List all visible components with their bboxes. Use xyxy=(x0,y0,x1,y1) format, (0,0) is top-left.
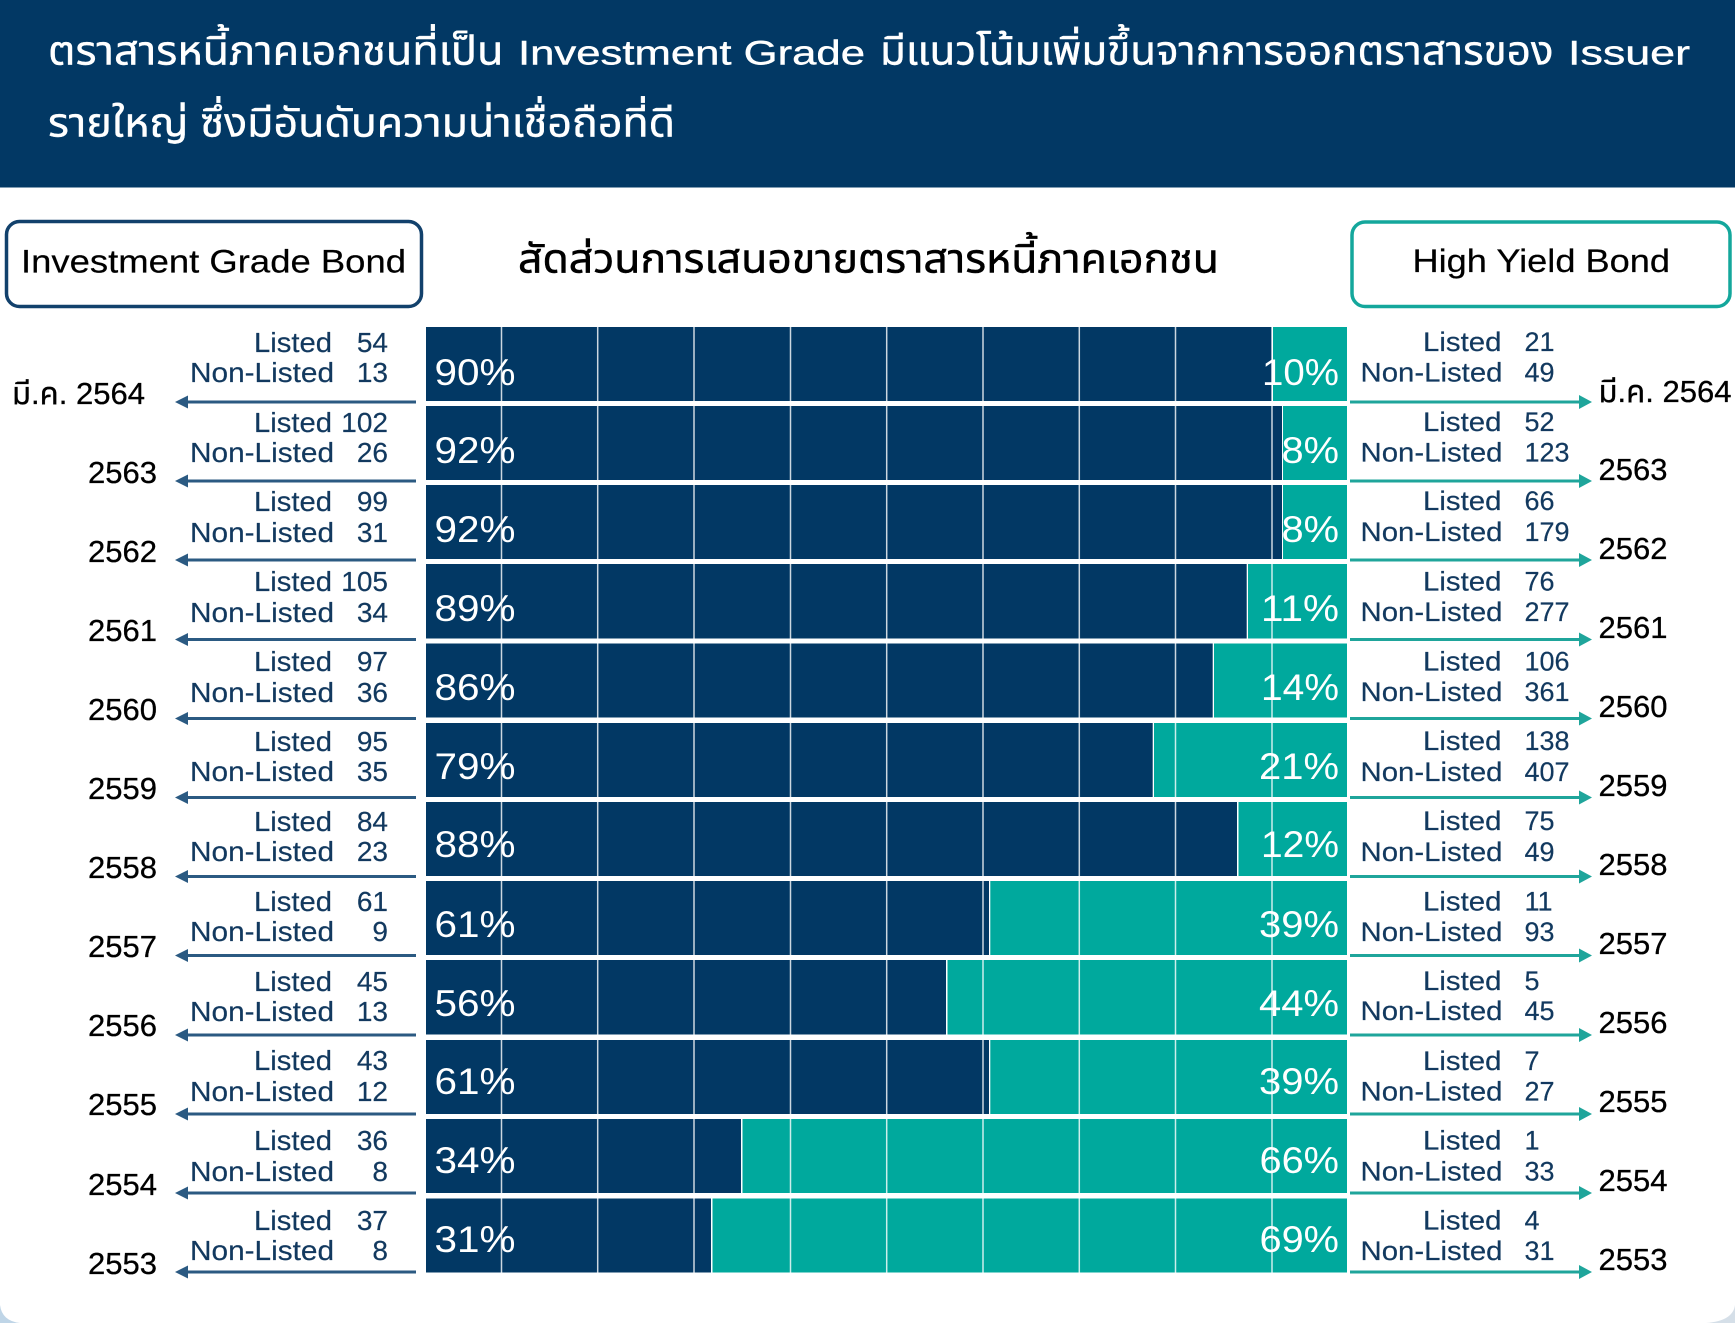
row: 2553 high yield: 31 xyxy=(1524,1236,1555,1266)
row: 2560 high yield: Non-Listed xyxy=(1360,677,1502,707)
row: 2560 investment grade: Non-Listed xyxy=(190,677,334,708)
row: 2555 high yield: 27 xyxy=(1524,1076,1555,1106)
bar: 2561: 89% xyxy=(434,588,516,629)
row: 2558 high yield xyxy=(1350,806,1667,884)
row: 2559 high yield: 2559 xyxy=(1598,768,1667,803)
bar: 2559: 79% xyxy=(434,746,516,787)
header banner with title: Investment Grade xyxy=(518,34,865,72)
row: 2553 investment grade: 2553 xyxy=(88,1246,157,1281)
row: 2557 investment grade xyxy=(88,886,416,964)
row: 2554 high yield: 2554 xyxy=(1598,1163,1667,1198)
row: 2554 investment grade: 36 xyxy=(357,1125,388,1156)
bar: 2563: 92% xyxy=(434,430,516,471)
row: 2562 high yield: Listed xyxy=(1423,486,1502,516)
row: 2555 investment grade: 2555 xyxy=(88,1087,157,1122)
row: 2554 investment grade: Non-Listed xyxy=(190,1156,334,1187)
row: 2561 investment grade: Non-Listed xyxy=(190,597,334,628)
bar: 2556: 44% xyxy=(1259,983,1339,1024)
row: มี.ค. 2564 high yield: Non-Listed xyxy=(1360,358,1502,388)
header banner with title: Issuer xyxy=(1568,34,1690,72)
row: มี.ค. 2564 investment grade xyxy=(12,327,416,411)
row: 2563 high yield: 2563 xyxy=(1598,452,1667,487)
row: 2558 high yield: 75 xyxy=(1524,806,1555,836)
row: 2562 investment grade: 2562 xyxy=(88,534,157,569)
row: 2558 high yield: Non-Listed xyxy=(1360,837,1502,867)
row: 2553 high yield: 4 xyxy=(1524,1206,1540,1236)
row: 2553 high yield: 2553 xyxy=(1598,1242,1667,1277)
row: 2554 high yield: Listed xyxy=(1423,1126,1502,1156)
row: 2554 high yield xyxy=(1350,1126,1667,1200)
row: มี.ค. 2564 high yield xyxy=(1350,327,1732,409)
row: 2554 high yield: 1 xyxy=(1524,1126,1540,1156)
row: 2563 investment grade: 26 xyxy=(357,437,388,468)
row: 2557 investment grade: 9 xyxy=(372,916,388,947)
row: 2560 high yield: Listed xyxy=(1423,646,1502,676)
row: 2556 high yield: Non-Listed xyxy=(1360,996,1502,1026)
bar: 2553: 31% xyxy=(434,1219,516,1260)
bar: 2554: 34% xyxy=(434,1140,516,1181)
legend box: High Yield Bond: High Yield Bond xyxy=(1412,243,1670,279)
bar: 2557 xyxy=(426,881,1347,955)
bar: 2556: 56% xyxy=(434,983,516,1024)
row: 2556 investment grade xyxy=(88,966,416,1043)
row: 2559 high yield: 407 xyxy=(1524,757,1570,787)
bar: 2556 xyxy=(426,960,1347,1034)
row: 2560 investment grade: 2560 xyxy=(88,692,157,727)
header banner with title xyxy=(0,0,1735,188)
row: 2560 investment grade: 36 xyxy=(357,677,388,708)
row: 2563 high yield: 123 xyxy=(1524,438,1570,468)
row: 2562 investment grade: 31 xyxy=(357,517,388,548)
row: 2559 investment grade: Listed xyxy=(254,726,332,757)
row: 2554 investment grade xyxy=(88,1125,416,1202)
row: 2557 high yield: 93 xyxy=(1524,917,1555,947)
row: มี.ค. 2564 high yield: มี.ค. 2564 xyxy=(1598,374,1732,409)
row: 2562 high yield: 66 xyxy=(1524,486,1555,516)
row: 2556 high yield: Listed xyxy=(1423,966,1502,996)
bar: 2554: 66% xyxy=(1260,1140,1339,1181)
bar: 2559: 21% xyxy=(1259,746,1339,787)
row: 2563 high yield: Listed xyxy=(1423,407,1502,437)
row: 2560 investment grade xyxy=(88,646,416,727)
row: มี.ค. 2564 investment grade: Listed xyxy=(254,327,332,358)
row: 2561 high yield xyxy=(1350,566,1667,646)
bar: 2555: 39% xyxy=(1259,1061,1339,1102)
row: 2563 investment grade: 102 xyxy=(341,407,388,438)
row: 2556 high yield xyxy=(1350,966,1667,1042)
row: 2555 investment grade: 43 xyxy=(357,1045,388,1076)
row: 2557 high yield: Non-Listed xyxy=(1360,917,1502,947)
row: 2558 investment grade: Non-Listed xyxy=(190,836,334,867)
row: 2561 investment grade xyxy=(88,566,416,648)
row: 2555 investment grade: Listed xyxy=(254,1045,332,1076)
bar: 2561: 11% xyxy=(1261,588,1339,629)
bar: 2555: 61% xyxy=(434,1061,516,1102)
row: 2558 high yield: 2558 xyxy=(1598,847,1667,882)
row: มี.ค. 2564 investment grade: 54 xyxy=(357,327,388,358)
bar: 2562 xyxy=(426,485,1347,559)
row: 2559 high yield: Non-Listed xyxy=(1360,757,1502,787)
row: 2558 investment grade xyxy=(88,806,416,885)
row: 2556 investment grade: 13 xyxy=(357,996,388,1027)
row: 2562 high yield xyxy=(1350,486,1667,567)
bar: 2558 xyxy=(426,802,1347,876)
row: 2561 high yield: 76 xyxy=(1524,566,1555,596)
legend box: High Yield Bond xyxy=(1352,222,1730,306)
bar: 2562: 92% xyxy=(434,509,516,550)
row: 2559 high yield xyxy=(1350,726,1667,804)
row: 2563 investment grade: Listed xyxy=(254,407,332,438)
header banner with title: มีแนวโน้มเพิ่มขึ้นจากการออกตราสารของ xyxy=(880,24,1554,74)
bar: มี.ค. 2564: 10% xyxy=(1262,352,1339,393)
row: 2556 high yield: 2556 xyxy=(1598,1005,1667,1040)
bar: 2562: 8% xyxy=(1282,509,1339,550)
bar: 2554 xyxy=(426,1119,1347,1193)
row: 2561 high yield: 277 xyxy=(1524,597,1570,627)
row: 2560 investment grade: 97 xyxy=(357,646,388,677)
row: 2558 investment grade: 84 xyxy=(357,806,388,837)
row: 2558 high yield: 49 xyxy=(1524,837,1555,867)
row: 2559 investment grade xyxy=(88,726,416,806)
row: 2559 investment grade: Non-Listed xyxy=(190,756,334,787)
row: 2563 investment grade: Non-Listed xyxy=(190,437,334,468)
bar: 2559 xyxy=(426,723,1347,797)
row: 2559 investment grade: 95 xyxy=(357,726,388,757)
row: 2554 investment grade: 2554 xyxy=(88,1167,157,1202)
row: 2562 high yield: 2562 xyxy=(1598,531,1667,566)
row: 2557 high yield: 11 xyxy=(1524,886,1553,916)
row: 2555 investment grade: 12 xyxy=(357,1076,388,1107)
row: 2561 high yield: 2561 xyxy=(1598,610,1667,645)
bar: 2557: 39% xyxy=(1259,904,1339,945)
row: 2557 investment grade: 2557 xyxy=(88,929,157,964)
row: 2555 investment grade: Non-Listed xyxy=(190,1076,334,1107)
bar: 2555 xyxy=(426,1040,1347,1114)
row: 2555 high yield: Non-Listed xyxy=(1360,1076,1502,1106)
High Yield counts, arrows and years xyxy=(1350,327,1732,1279)
bar: มี.ค. 2564: 90% xyxy=(434,352,516,393)
bar: 2553: 69% xyxy=(1260,1219,1339,1260)
row: 2560 investment grade: Listed xyxy=(254,646,332,677)
row: 2562 high yield: Non-Listed xyxy=(1360,517,1502,547)
row: 2557 investment grade: Non-Listed xyxy=(190,916,334,947)
row: 2556 high yield: 45 xyxy=(1524,996,1555,1026)
bar: 2553 xyxy=(426,1198,1347,1272)
row: 2557 high yield: Listed xyxy=(1423,886,1502,916)
row: 2553 investment grade: 8 xyxy=(372,1235,388,1266)
row: 2561 investment grade: 2561 xyxy=(88,613,157,648)
row: 2553 investment grade xyxy=(88,1205,416,1281)
bar: มี.ค. 2564 xyxy=(426,327,1347,401)
bar: 2557: 61% xyxy=(434,904,516,945)
row: 2554 investment grade: Listed xyxy=(254,1125,332,1156)
row: 2562 high yield: 179 xyxy=(1524,517,1570,547)
row: 2556 investment grade: 2556 xyxy=(88,1008,157,1043)
row: 2562 investment grade xyxy=(88,486,416,569)
row: 2556 high yield: 5 xyxy=(1524,966,1540,996)
row: 2563 high yield xyxy=(1350,407,1667,488)
header banner with title: รายใหญ่ ซึ่งมีอันดับความน่าเชื่อถือที่ดี xyxy=(48,96,675,146)
row: 2560 high yield: 361 xyxy=(1524,677,1570,707)
row: 2558 investment grade: 2558 xyxy=(88,850,157,885)
row: มี.ค. 2564 high yield: 49 xyxy=(1524,358,1555,388)
row: 2555 high yield: 7 xyxy=(1524,1046,1540,1076)
bar: 2563 xyxy=(426,406,1347,480)
row: 2557 investment grade: Listed xyxy=(254,886,332,917)
row: 2562 investment grade: Non-Listed xyxy=(190,517,334,548)
row: 2558 high yield: Listed xyxy=(1423,806,1502,836)
bar: 2560: 14% xyxy=(1261,667,1339,708)
header banner with title: ตราสารหนี้ภาคเอกชนที่เป็น xyxy=(48,24,504,74)
bar: 2561 xyxy=(426,564,1347,638)
row: 2553 high yield: Listed xyxy=(1423,1206,1502,1236)
row: 2555 high yield: Listed xyxy=(1423,1046,1502,1076)
row: 2556 investment grade: Listed xyxy=(254,966,332,997)
row: 2554 investment grade: 8 xyxy=(372,1156,388,1187)
row: 2560 high yield: 106 xyxy=(1524,646,1570,676)
legend box: Investment Grade Bond: Investment Grade Bond xyxy=(21,244,406,280)
row: มี.ค. 2564 high yield: 21 xyxy=(1524,327,1555,357)
row: 2556 investment grade: 45 xyxy=(357,966,388,997)
row: 2554 high yield: 33 xyxy=(1524,1156,1555,1186)
row: 2559 investment grade: 2559 xyxy=(88,771,157,806)
row: 2553 investment grade: Listed xyxy=(254,1205,332,1236)
Investment Grade counts, arrows and years xyxy=(12,327,416,1281)
row: 2562 investment grade: Listed xyxy=(254,486,332,517)
row: 2555 high yield: 2555 xyxy=(1598,1084,1667,1119)
row: 2554 high yield: Non-Listed xyxy=(1360,1156,1502,1186)
row: มี.ค. 2564 investment grade: มี.ค. 2564 xyxy=(12,376,145,411)
row: 2553 investment grade: 37 xyxy=(357,1205,388,1236)
row: 2563 investment grade: 2563 xyxy=(88,455,157,490)
row: 2557 high yield xyxy=(1350,886,1667,962)
row: 2561 investment grade: 105 xyxy=(341,566,388,597)
row: 2559 high yield: Listed xyxy=(1423,726,1502,756)
row: 2559 high yield: 138 xyxy=(1524,726,1570,756)
row: 2557 investment grade: 61 xyxy=(357,886,388,917)
row: 2557 high yield: 2557 xyxy=(1598,926,1667,961)
row: 2561 investment grade: 34 xyxy=(357,597,388,628)
row: 2553 high yield xyxy=(1350,1206,1667,1279)
row: 2560 high yield xyxy=(1350,646,1667,726)
chart heading: สัดส่วนการเสนอขายตราสารหนี้ภาคเอกชน xyxy=(518,232,1219,282)
bar: 2558: 88% xyxy=(434,824,516,865)
bar: 2560 xyxy=(426,644,1347,718)
bar: 2560: 86% xyxy=(434,667,516,708)
row: 2558 investment grade: Listed xyxy=(254,806,332,837)
bar: 2563: 8% xyxy=(1282,430,1339,471)
row: 2555 investment grade xyxy=(88,1045,416,1122)
row: 2561 investment grade: Listed xyxy=(254,566,332,597)
row: 2559 investment grade: 35 xyxy=(357,756,388,787)
row: 2563 high yield: Non-Listed xyxy=(1360,438,1502,468)
row: 2560 high yield: 2560 xyxy=(1598,689,1667,724)
row: 2553 high yield: Non-Listed xyxy=(1360,1236,1502,1266)
row: 2562 investment grade: 99 xyxy=(357,486,388,517)
row: มี.ค. 2564 high yield: Listed xyxy=(1423,327,1502,357)
stacked bar chart xyxy=(426,327,1347,1272)
row: 2563 investment grade xyxy=(88,407,416,490)
row: มี.ค. 2564 investment grade: 13 xyxy=(357,357,388,388)
row: 2561 high yield: Non-Listed xyxy=(1360,597,1502,627)
row: 2561 high yield: Listed xyxy=(1423,566,1502,596)
row: 2558 investment grade: 23 xyxy=(357,836,388,867)
row: 2563 high yield: 52 xyxy=(1524,407,1555,437)
row: 2553 investment grade: Non-Listed xyxy=(190,1235,334,1266)
legend box: Investment Grade Bond xyxy=(6,222,422,306)
row: มี.ค. 2564 investment grade: Non-Listed xyxy=(190,357,334,388)
row: 2555 high yield xyxy=(1350,1046,1667,1121)
bar: 2558: 12% xyxy=(1261,824,1339,865)
row: 2556 investment grade: Non-Listed xyxy=(190,996,334,1027)
